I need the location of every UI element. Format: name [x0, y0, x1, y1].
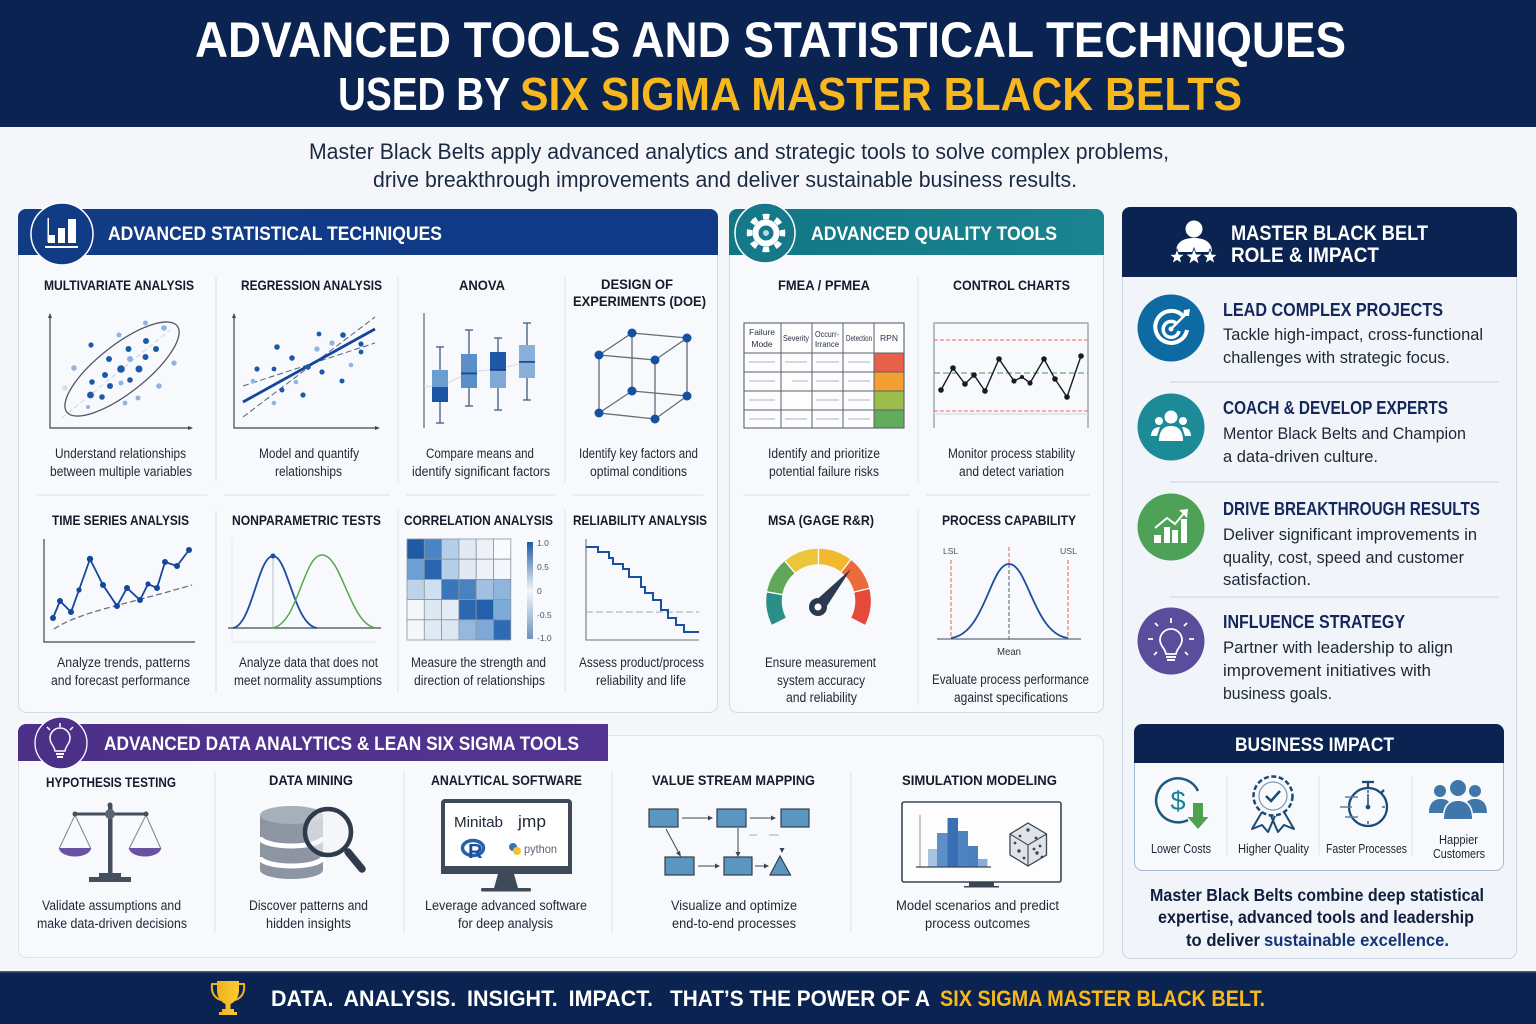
item: control charts: and detect variation — [959, 464, 1064, 479]
item: simulation modeling: SIMULATION MODELING — [902, 772, 1057, 788]
role: lead complex projects: LEAD COMPLEX PROJECTS — [1223, 300, 1443, 320]
fmea table: Severity — [783, 333, 810, 343]
capability curve: LSL — [943, 546, 958, 556]
item: fmea: FMEA / PFMEA — [778, 277, 870, 293]
closing statement — [1150, 885, 1484, 950]
role: drive breakthrough results: satisfaction. — [1223, 570, 1311, 589]
item: nonparametric tests: meet normality assumptions — [234, 673, 382, 688]
closing statement: sustainable excellence. — [1264, 930, 1449, 950]
item: anova: Compare means and — [426, 446, 534, 461]
item: regression analysis: Model and quantify — [259, 446, 359, 461]
icon: trophy — [212, 981, 244, 1015]
impact: happier customers: Happier — [1439, 833, 1478, 847]
impact: higher quality: Higher Quality — [1238, 842, 1310, 856]
icon: customers group — [1429, 780, 1487, 819]
title banner — [0, 0, 1536, 127]
item: value stream mapping: end-to-end processes — [672, 916, 796, 931]
impact: faster processes — [1326, 782, 1407, 856]
fmea table: Irrance — [815, 339, 839, 349]
closing statement: Master Black Belts combine deep statistical — [1150, 885, 1484, 905]
subtitle — [309, 139, 1169, 192]
correlation heatmap: -1.0 — [537, 633, 552, 643]
item: control charts: CONTROL CHARTS — [953, 277, 1070, 293]
icon: team — [1138, 394, 1204, 460]
panel heading: ROLE & IMPACT — [1231, 244, 1379, 267]
role: influence strategy: business goals. — [1223, 684, 1332, 703]
item: analytical software: ANALYTICAL SOFTWARE — [431, 772, 582, 788]
monitor with software logos: python — [524, 842, 557, 856]
panel: advanced quality tools — [729, 203, 1104, 712]
item: reliability analysis: Assess product/process — [579, 655, 704, 670]
role: drive breakthrough results: DRIVE BREAKTHROUGH RESULTS — [1223, 499, 1480, 519]
item: data mining: Discover patterns and — [249, 898, 368, 913]
item: control charts — [934, 277, 1088, 479]
panel heading — [729, 203, 1104, 263]
correlation heatmap: 0 — [537, 586, 542, 596]
item: multivariate analysis — [44, 277, 194, 479]
role: drive breakthrough results — [1138, 494, 1480, 589]
item: msa gage r&r: Ensure measurement — [765, 655, 876, 670]
item: nonparametric tests: NONPARAMETRIC TESTS — [232, 512, 381, 528]
footer tagline — [271, 986, 1265, 1011]
icon: dollar with down arrow: $ — [1170, 786, 1186, 816]
item: correlation analysis: CORRELATION ANALYSIS — [404, 512, 553, 528]
item: data mining: hidden insights — [266, 916, 351, 931]
fmea table: Detection — [846, 333, 872, 343]
item: nonparametric tests — [228, 512, 382, 688]
title line 2: USED BY — [338, 68, 510, 120]
item: multivariate analysis: Understand relationships — [55, 446, 186, 461]
item: regression analysis — [232, 277, 382, 479]
database with magnifier icon — [260, 806, 362, 879]
item: process capability: against specifications — [954, 690, 1068, 705]
item: reliability analysis: RELIABILITY ANALYSIS — [573, 512, 707, 528]
item: design of experiments: Identify key factors and — [579, 446, 698, 461]
item: msa gage r&r: and reliability — [786, 690, 857, 705]
fmea table: Failure — [749, 327, 775, 337]
item: process capability — [932, 512, 1089, 705]
item: design of experiments: DESIGN OF — [601, 276, 673, 292]
item: msa gage r&r — [765, 512, 876, 705]
role: drive breakthrough results: quality, cost, speed and customer — [1223, 548, 1464, 567]
correlation heatmap: 0.5 — [537, 562, 549, 572]
icon: light bulb — [1138, 608, 1204, 674]
impact: happier customers: Customers — [1433, 847, 1485, 861]
item: time series analysis — [44, 512, 195, 688]
correlation heatmap: 1.0 — [537, 538, 549, 548]
panel heading: ADVANCED QUALITY TOOLS — [811, 224, 1057, 245]
fmea table: Mode — [751, 339, 773, 349]
correlation heatmap: -0.5 — [537, 610, 552, 620]
subtitle: Master Black Belts apply advanced analytics and strategic tools to solve complex problems, — [309, 139, 1169, 164]
business impact box: BUSINESS IMPACT — [1235, 735, 1394, 756]
item: analytical software — [425, 772, 587, 931]
reliability step curve — [586, 539, 699, 640]
item: regression analysis: relationships — [275, 464, 342, 479]
panel heading: MASTER BLACK BELT — [1231, 222, 1428, 245]
simulation monitor with histogram and dice — [902, 802, 1061, 888]
impact: happier customers — [1429, 780, 1487, 861]
control chart — [934, 323, 1088, 428]
balance scale icon — [59, 802, 161, 882]
item: regression analysis: REGRESSION ANALYSIS — [241, 277, 382, 293]
item: msa gage r&r: MSA (GAGE R&R) — [768, 512, 874, 528]
panel heading — [1122, 207, 1517, 277]
item: hypothesis testing: Validate assumptions and — [42, 898, 181, 913]
item: hypothesis testing: HYPOTHESIS TESTING — [46, 774, 176, 790]
item: multivariate analysis: between multiple variables — [50, 464, 192, 479]
capability curve: USL — [1060, 546, 1077, 556]
role: lead complex projects: Tackle high-impact, cross-functional — [1223, 325, 1483, 344]
item: anova: ANOVA — [459, 277, 505, 293]
item: data mining: DATA MINING — [269, 772, 353, 788]
panel heading — [18, 203, 718, 265]
item: fmea: Identify and prioritize — [768, 446, 880, 461]
correlation heatmap — [407, 538, 552, 643]
role: lead complex projects: challenges with strategic focus. — [1223, 348, 1450, 367]
item: value stream mapping: VALUE STREAM MAPPING — [652, 772, 815, 788]
item: reliability analysis: reliability and life — [596, 673, 686, 688]
box plot chart — [424, 313, 535, 428]
role: influence strategy: INFLUENCE STRATEGY — [1223, 612, 1405, 632]
business impact box — [1134, 724, 1504, 870]
item: correlation analysis — [404, 512, 553, 688]
fmea table: Occurr- — [815, 329, 839, 339]
item: reliability analysis — [573, 512, 707, 688]
closing statement: to deliver — [1186, 930, 1260, 950]
item: simulation modeling: process outcomes — [925, 916, 1030, 931]
icon: growth chart — [1138, 494, 1204, 560]
item: simulation modeling: Model scenarios and predict — [896, 898, 1059, 913]
title line 1: ADVANCED TOOLS AND STATISTICAL TECHNIQUES — [195, 12, 1346, 68]
role: coach and develop experts: Mentor Black Belts and Champion — [1223, 424, 1466, 443]
item: time series analysis: Analyze trends, patterns — [57, 655, 190, 670]
item: simulation modeling — [896, 772, 1061, 931]
item: time series analysis: TIME SERIES ANALYSIS — [52, 512, 189, 528]
scatter chart with ellipse — [48, 307, 193, 431]
capability curve — [937, 546, 1081, 658]
panel: data analytics and lean six sigma tools — [18, 717, 1104, 958]
role: coach and develop experts: COACH & DEVELOP EXPERTS — [1223, 398, 1448, 418]
footer tagline: DATA. ANALYSIS. INSIGHT. IMPACT. — [271, 986, 653, 1011]
factorial cube — [594, 328, 692, 424]
fmea table: RPN — [880, 333, 898, 343]
monitor with software logos: R — [468, 841, 483, 863]
role: influence strategy: improvement initiatives with — [1223, 661, 1431, 680]
item: msa gage r&r: system accuracy — [777, 673, 865, 688]
item: correlation analysis: direction of relationships — [414, 673, 545, 688]
item: fmea — [744, 277, 904, 479]
panel heading: ADVANCED STATISTICAL TECHNIQUES — [108, 224, 442, 245]
panel: master black belt role and impact — [1122, 207, 1517, 958]
fmea table — [744, 323, 904, 428]
impact: lower costs — [1151, 778, 1211, 856]
capability curve: Mean — [997, 646, 1021, 658]
item: nonparametric tests: Analyze data that does not — [239, 655, 378, 670]
item: analytical software: Leverage advanced software — [425, 898, 587, 913]
distribution curves — [228, 539, 381, 642]
title line 2: SIX SIGMA MASTER BLACK BELTS — [520, 68, 1242, 120]
item: data mining — [249, 772, 368, 931]
process flow diagram — [649, 809, 809, 875]
role: drive breakthrough results: Deliver significant improvements in — [1223, 525, 1477, 544]
item: process capability: Evaluate process performance — [932, 672, 1089, 687]
role: coach and develop experts: a data-driven culture. — [1223, 447, 1378, 466]
time series line chart — [44, 539, 195, 642]
footer tagline: SIX SIGMA MASTER BLACK BELT. — [940, 986, 1265, 1011]
icon: person with stars — [1169, 220, 1218, 264]
impact: higher quality — [1238, 776, 1310, 856]
item: anova: identify significant factors — [412, 464, 550, 479]
item: value stream mapping — [649, 772, 815, 931]
footer banner — [0, 971, 1536, 1024]
role: influence strategy — [1138, 608, 1453, 703]
icon: stopwatch — [1340, 782, 1387, 826]
regression chart — [232, 313, 380, 430]
item: control charts: Monitor process stability — [948, 446, 1075, 461]
panel: advanced statistical techniques — [18, 203, 718, 712]
item: hypothesis testing: make data-driven decisions — [37, 916, 187, 931]
item: multivariate analysis: MULTIVARIATE ANALYSIS — [44, 277, 194, 293]
role: coach and develop experts — [1138, 394, 1466, 466]
item: analytical software: for deep analysis — [458, 916, 553, 931]
impact: faster processes: Faster Processes — [1326, 842, 1407, 856]
panel heading — [18, 717, 608, 769]
subtitle: drive breakthrough improvements and deliver sustainable business results. — [373, 167, 1077, 192]
item: fmea: potential failure risks — [769, 464, 879, 479]
item: time series analysis: and forecast performance — [51, 673, 190, 688]
icon: award ribbon — [1252, 776, 1294, 832]
item: correlation analysis: Measure the strength and — [411, 655, 546, 670]
item: hypothesis testing — [37, 774, 187, 931]
impact: lower costs: Lower Costs — [1151, 842, 1211, 856]
closing statement: expertise, advanced tools and leadership — [1158, 907, 1474, 927]
panel heading: ADVANCED DATA ANALYTICS & LEAN SIX SIGMA TOOLS — [104, 734, 579, 755]
footer tagline: THAT’S THE POWER OF A — [670, 986, 930, 1011]
icon: target — [1138, 294, 1204, 362]
item: design of experiments — [573, 276, 706, 479]
item: process capability: PROCESS CAPABILITY — [942, 512, 1077, 528]
gauge — [766, 548, 870, 621]
role: influence strategy: Partner with leadership to align — [1223, 638, 1453, 657]
monitor with software logos: Minitab — [454, 814, 503, 831]
role: lead complex projects — [1138, 294, 1483, 367]
monitor with software logos: jmp — [517, 812, 546, 831]
item: anova — [412, 277, 550, 479]
monitor with software logos — [441, 801, 572, 892]
item: design of experiments: optimal conditions — [590, 464, 687, 479]
item: design of experiments: EXPERIMENTS (DOE) — [573, 293, 706, 309]
item: value stream mapping: Visualize and optimize — [671, 898, 797, 913]
